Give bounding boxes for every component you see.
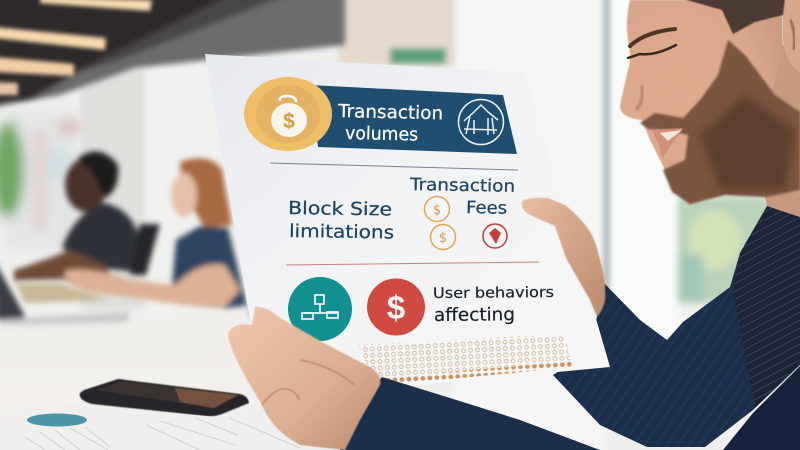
banner: transaction volumes [244, 77, 517, 154]
divider [286, 262, 539, 265]
icon: gold coin with money bag: $ [283, 110, 295, 133]
mouth [652, 128, 683, 158]
document logo [27, 414, 87, 426]
hair [680, 0, 785, 34]
beard [640, 40, 800, 204]
lower jacket panel [723, 366, 800, 450]
blurred colleague: woman in blue [64, 158, 250, 318]
text: block size limitations [288, 198, 394, 243]
man's neck and ear [730, 0, 800, 217]
handheld infographic sheet [205, 54, 610, 386]
man's face [620, 0, 800, 205]
smartphone on table [80, 379, 249, 416]
text: transaction: Transaction [409, 175, 515, 197]
text: user behaviors affecting [433, 285, 554, 326]
blurred colleague: man in dark shirt [14, 151, 160, 281]
banner background [310, 85, 517, 154]
printed document on table [0, 404, 310, 450]
text: block size limitations: Block Size [288, 198, 392, 220]
text: user behaviors affecting: affecting [434, 304, 515, 326]
icon: gold coin two [430, 224, 456, 250]
divider [270, 163, 518, 170]
banner heading: Transaction [337, 101, 443, 124]
ceiling [0, 0, 345, 108]
dot pattern strip [358, 335, 573, 384]
icon: red diamond coin [483, 224, 507, 248]
white table with laptop [0, 262, 250, 410]
pinstripe jacket panel [733, 206, 800, 408]
icon: teal network circle [288, 277, 352, 341]
icon: gold coin with money bag [244, 77, 332, 151]
icon: houses in circle [458, 100, 504, 144]
icon: red dollar circle [367, 278, 425, 336]
text: user behaviors affecting: User behaviors [433, 285, 554, 302]
window greenery [678, 197, 770, 303]
right hand holding sheet [522, 198, 605, 317]
eyebrow and eye [628, 29, 676, 58]
nose shadow [636, 85, 643, 110]
text: fees: Fees [466, 198, 507, 219]
ceiling lights [0, 0, 152, 95]
text: block size limitations: limitations [289, 221, 394, 243]
man's sweater [553, 206, 800, 450]
banner: transaction volumes: volumes [345, 123, 418, 146]
wall board and plant [0, 110, 80, 250]
icon: gold coin one [424, 196, 450, 222]
left hand holding sheet [228, 307, 380, 450]
icon: gold coin two: $ [439, 231, 447, 246]
icon: red dollar circle: $ [387, 289, 405, 326]
man's sleeve lower left [340, 377, 600, 450]
icon: gold coin one: $ [433, 203, 441, 218]
